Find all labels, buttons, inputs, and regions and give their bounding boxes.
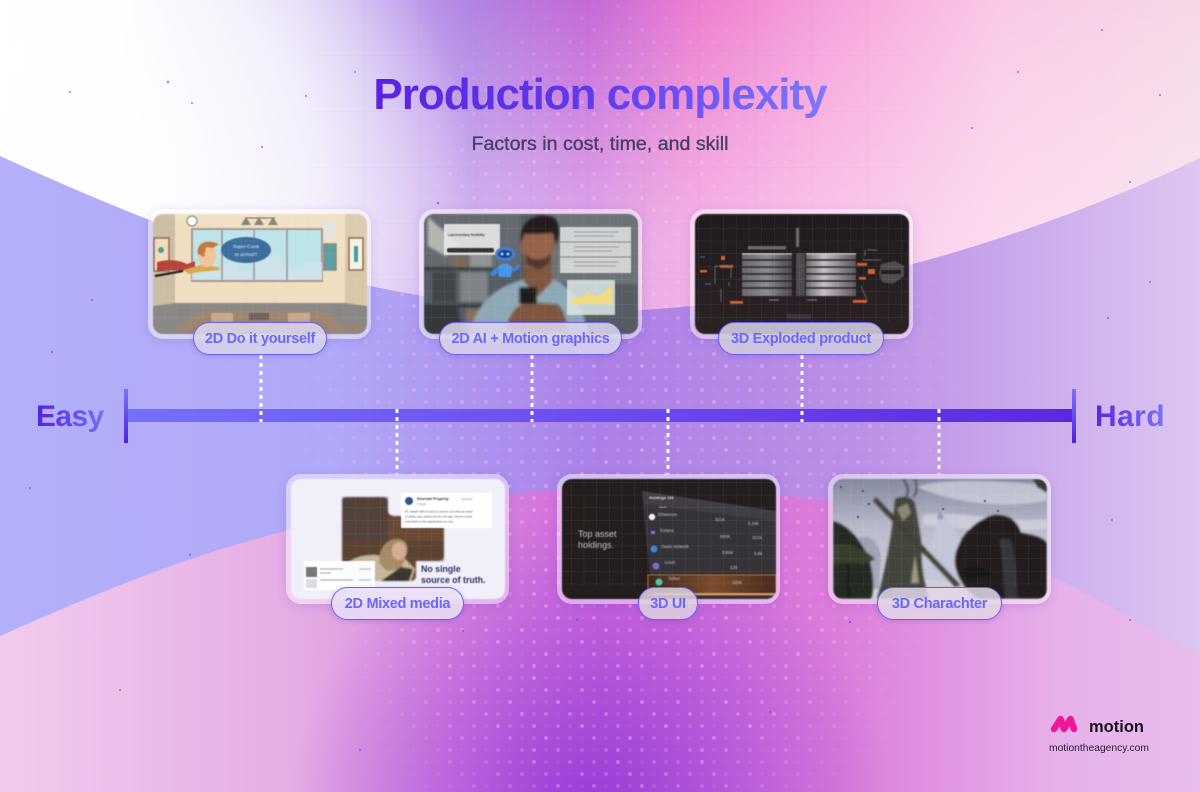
icon: motion mark xyxy=(1050,716,1078,732)
card: 2D Mixed media: Emerald Property xyxy=(417,497,450,501)
pill: 3D Charachter xyxy=(877,587,1002,620)
subtitle: Factors in cost, time, and skill xyxy=(472,133,728,155)
label: Easy: Easy xyxy=(36,400,104,433)
card: 3D UI: Asset xyxy=(659,505,667,509)
pill: 3D Charachter: 3D Charachter xyxy=(892,596,987,612)
card: 3D UI: 321K xyxy=(715,517,725,522)
card: 3D UI: Solana xyxy=(660,528,674,533)
wordmark: motion xyxy=(1089,718,1144,736)
card: 3D UI: 950K xyxy=(720,534,730,539)
card: 2D Mixed media: No single xyxy=(421,564,461,574)
card: 2D Mixed media: source of truth. xyxy=(421,575,486,585)
pill: 3D UI xyxy=(638,587,698,620)
card: 3D UI: 5.8k xyxy=(754,551,763,556)
pill: 2D Mixed media xyxy=(331,587,464,620)
pill: 2D Mixed media: 2D Mixed media xyxy=(345,596,450,612)
card: 3D UI: 320K xyxy=(732,580,742,585)
card: 3D UI: AAVE xyxy=(664,560,675,565)
card: 3D UI: 321K xyxy=(752,535,762,540)
pill: 2D Do it yourself xyxy=(193,322,327,355)
card: 3D Exploded product xyxy=(690,209,913,339)
card: 3D Charachter xyxy=(828,474,1051,604)
card: 2D Do it yourself: Super-Cook xyxy=(233,244,259,250)
website: motiontheagency.com xyxy=(1049,743,1149,754)
card: 2D Mixed media: mismatch in the application we use. xyxy=(405,520,454,524)
card: 3D UI: Ethereum xyxy=(658,512,677,517)
card: 2D Mixed media: Just Now xyxy=(461,497,473,501)
card: 2D Mixed media: to Sarah xyxy=(417,503,427,506)
card: 3D UI: Holdings 116 xyxy=(649,495,674,500)
pill: 2D AI + Motion graphics: 2D AI + Motion graphics xyxy=(451,331,610,347)
pill: 3D UI: 3D UI xyxy=(650,596,686,612)
card: 3D UI: Top asset xyxy=(578,529,617,539)
logo: motion xyxy=(1049,716,1149,754)
card: 3D UI: 530M xyxy=(722,550,733,555)
pill: 2D AI + Motion graphics xyxy=(439,322,622,355)
pill: 3D Exploded product: 3D Exploded product xyxy=(731,331,871,347)
timeline axis xyxy=(124,389,1076,443)
card: 2D Mixed media: Hi, Sarah! We're sorry to inform you that we need xyxy=(405,510,473,514)
pill: 3D Exploded product xyxy=(718,322,884,355)
card: 3D UI: 5.34k xyxy=(748,521,760,526)
card: 2D Do it yourself xyxy=(148,209,371,339)
card: 3D UI: holdings. xyxy=(578,540,614,550)
card: 3D UI: Tether xyxy=(668,576,681,581)
card: 2D AI + Motion graphics: Low-inventory flexibility xyxy=(448,233,485,237)
card: 2D Mixed media: to delay your check-ins for one day. there's some xyxy=(405,514,472,518)
card: 2D Mixed media xyxy=(286,474,509,604)
card: 2D Do it yourself: in action!! xyxy=(235,252,258,258)
card: 3D UI: Oasis network xyxy=(661,544,690,549)
card: 3D UI: 129 xyxy=(730,565,738,570)
card: 2D AI + Motion graphics xyxy=(419,209,642,339)
title: Production complexity xyxy=(373,70,827,119)
pill: 2D Do it yourself: 2D Do it yourself xyxy=(205,331,315,347)
label: Hard: Hard xyxy=(1095,400,1165,433)
card: 3D UI xyxy=(557,474,780,604)
card: 2D Do it yourself: Animaker xyxy=(343,325,362,330)
